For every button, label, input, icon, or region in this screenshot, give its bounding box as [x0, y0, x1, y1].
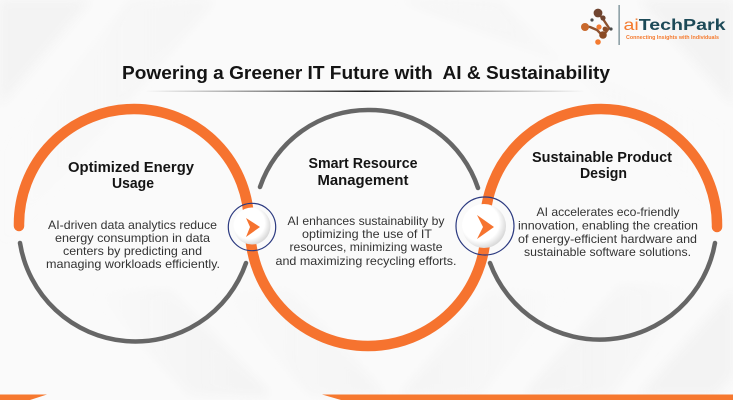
- body text: AI enhances sustainability by: [288, 214, 445, 228]
- body text: [276, 214, 456, 268]
- arc: right grey: [490, 243, 715, 340]
- body text: optimizing the use of IT: [302, 227, 432, 241]
- footer bar: right: [322, 394, 733, 400]
- panel: smart resource management: [276, 156, 456, 268]
- logo: [581, 5, 726, 45]
- heading: Sustainable Product: [532, 150, 672, 166]
- footer bar: left: [0, 394, 47, 400]
- body text: energy consumption in data: [55, 231, 210, 245]
- button: right arrow: [456, 197, 514, 255]
- body text: and maximizing recycling efforts.: [276, 254, 456, 268]
- body text: innovation, enabling the creation: [518, 218, 698, 232]
- logo icon: [581, 9, 613, 45]
- body text: centers by predicting and: [63, 244, 202, 258]
- body text: [46, 218, 220, 271]
- panel: sustainable product design: [518, 150, 698, 259]
- heading: Usage: [112, 176, 154, 192]
- logo wordmark: aiTechPark: [624, 17, 726, 34]
- heading: Optimized Energy: [68, 160, 194, 176]
- body text: managing workloads efficiently.: [46, 257, 220, 271]
- heading: Management: [318, 173, 409, 189]
- body text: sustainable software solutions.: [524, 245, 691, 259]
- arc: left orange: [19, 109, 249, 226]
- arc: middle orange: [250, 228, 486, 346]
- logo divider: [619, 5, 620, 45]
- body text: AI-driven data analytics reduce: [48, 218, 217, 232]
- heading: [68, 160, 194, 192]
- heading: Design: [580, 166, 627, 182]
- panel: optimized energy usage: [46, 160, 220, 271]
- body text: of energy-efficient hardware and: [518, 232, 697, 246]
- heading: [308, 156, 418, 189]
- arc: right orange: [485, 109, 717, 227]
- heading: [532, 150, 672, 182]
- body text: resources, minimizing waste: [290, 240, 443, 254]
- logo tagline: Connecting Insights with Individuals: [626, 35, 719, 41]
- heading: Smart Resource: [308, 156, 418, 172]
- body text: AI accelerates eco-friendly: [536, 205, 680, 219]
- title: Powering a Greener IT Future with AI & Sustainability: [122, 62, 611, 83]
- arc: left grey: [20, 243, 246, 341]
- button: left arrow: [228, 203, 276, 251]
- arc: middle grey: [260, 110, 478, 188]
- body text: [518, 205, 698, 259]
